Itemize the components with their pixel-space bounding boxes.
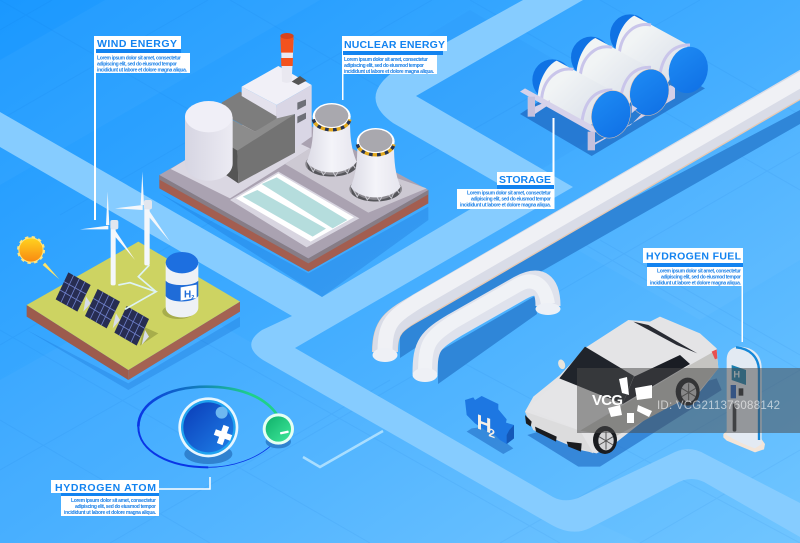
label: hydrogen fuel: incididunt ut labore et dolore magna aliqua.	[650, 280, 742, 286]
label: nuclear energy: NUCLEAR ENERGY	[344, 39, 445, 51]
electron orbit lower right	[208, 446, 271, 467]
label: hydrogen atom: HYDROGEN ATOM	[55, 482, 156, 494]
car shadow	[527, 378, 722, 467]
label: wind energy	[94, 36, 190, 220]
icon label: 2	[488, 425, 495, 441]
watermark band	[577, 368, 800, 433]
power wires branch	[138, 265, 156, 292]
grille	[535, 427, 557, 442]
label: hydrogen atom	[51, 477, 210, 516]
electron orbit upper	[138, 387, 277, 427]
label: wind energy: incididunt ut labore et dolore magna aliqua.	[97, 68, 188, 74]
label: hydrogen fuel	[643, 248, 743, 342]
mirror	[557, 358, 567, 370]
rear window	[633, 322, 697, 353]
island ground	[27, 242, 240, 380]
hydrogen engine icon	[465, 396, 514, 454]
icon body	[465, 396, 514, 444]
label: hydrogen atom: incididunt ut labore et dolore magna aliqua.	[64, 510, 157, 516]
hydrogen tank: H	[184, 289, 191, 300]
nucleus shadow	[184, 444, 232, 464]
long pipe shadow	[400, 110, 800, 358]
label: hydrogen atom: Lorem ipsum dolor sit amet, consectetur	[71, 498, 156, 504]
plant base	[159, 107, 428, 272]
label: nuclear energy: incididunt ut labore et dolore magna aliqua.	[344, 69, 435, 75]
electron shadow	[266, 435, 291, 448]
rack front frame	[520, 88, 637, 150]
front wheel	[593, 426, 617, 454]
label: nuclear energy: Lorem ipsum dolor sit amet, consectetur	[344, 57, 428, 63]
label: nuclear energy	[342, 36, 447, 100]
label: nuclear energy: adipiscing elit, sed do eiusmod tempor	[344, 63, 424, 69]
short hydrogen pipe	[412, 281, 560, 382]
chimney	[280, 33, 307, 85]
hydrogen atom	[138, 387, 294, 467]
hydrogen car	[525, 317, 722, 467]
icon side	[507, 425, 514, 444]
label: wind energy: WIND ENERGY	[97, 38, 177, 50]
long hydrogen pipe	[372, 57, 800, 362]
renewable energy island	[18, 172, 240, 390]
electron	[263, 413, 294, 445]
side panel	[580, 350, 718, 437]
ground shadow	[520, 43, 705, 156]
ground shadow	[160, 193, 428, 297]
sun	[18, 237, 59, 279]
tank three	[610, 14, 713, 97]
storage cylinder	[185, 101, 233, 181]
hydrogen tank: 2	[191, 295, 194, 301]
pump body	[727, 347, 762, 448]
pump sign text: H	[733, 369, 740, 379]
water pools	[236, 173, 354, 242]
pump slot	[733, 403, 736, 432]
wind turbine left	[80, 192, 135, 285]
rear wheel	[676, 378, 700, 406]
label: hydrogen fuel: Lorem ipsum dolor sit amet, consectetur	[657, 268, 741, 274]
watermark band: VCG	[592, 392, 623, 409]
short pipe shadow	[438, 296, 537, 384]
pump nozzle	[731, 385, 736, 398]
label: storage: Lorem ipsum dolor sit amet, consectetur	[467, 190, 551, 196]
windshield	[559, 347, 634, 404]
tank one body	[532, 59, 612, 129]
cooling tower one	[305, 103, 358, 176]
road outline mark	[303, 431, 383, 467]
hydrogen fuel pump	[723, 347, 765, 452]
label: hydrogen fuel: adipiscing elit, sed do eiusmod tempor	[661, 274, 741, 280]
label: wind energy: Lorem ipsum dolor sit amet, consectetur	[97, 56, 181, 62]
electron orbit lower left	[138, 427, 208, 467]
tail light	[712, 349, 717, 359]
lower intake	[567, 442, 582, 452]
icon label: H	[477, 410, 492, 438]
pump sign	[732, 365, 746, 385]
front bumper	[525, 412, 593, 453]
watermark band: ID: VCG211376088142	[657, 400, 780, 412]
tank two	[571, 37, 674, 120]
label: hydrogen fuel: HYDROGEN FUEL	[646, 250, 742, 262]
car body	[525, 317, 718, 453]
side windows	[623, 355, 690, 404]
power wires	[118, 283, 156, 309]
storage tanks	[520, 14, 713, 156]
label: wind energy: adipiscing elit, sed do eiusmod tempor	[97, 62, 177, 68]
hydrogen tank	[162, 252, 198, 319]
hood	[527, 379, 623, 431]
headlight left	[525, 415, 532, 427]
rack rear frame	[592, 85, 675, 147]
tank one end cap	[586, 86, 636, 142]
label: storage: STORAGE	[499, 174, 551, 186]
label: hydrogen atom: adipiscing elit, sed do eiusmod tempor	[75, 504, 156, 510]
cooling tower two	[349, 128, 402, 201]
ground shadow	[27, 317, 240, 390]
pump stripe	[736, 347, 759, 440]
label: storage	[457, 118, 554, 209]
label: storage: incididunt ut labore et dolore magna aliqua.	[460, 202, 552, 208]
pump display	[739, 388, 743, 396]
solar panels	[56, 272, 158, 346]
icon shadow	[467, 427, 513, 454]
nuclear power plant	[159, 33, 428, 297]
wind turbine right	[115, 172, 170, 265]
label: storage: adipiscing elit, sed do eiusmod tempor	[471, 196, 551, 202]
pump base	[723, 431, 765, 452]
nucleus	[178, 397, 238, 457]
reactor building	[222, 66, 312, 183]
